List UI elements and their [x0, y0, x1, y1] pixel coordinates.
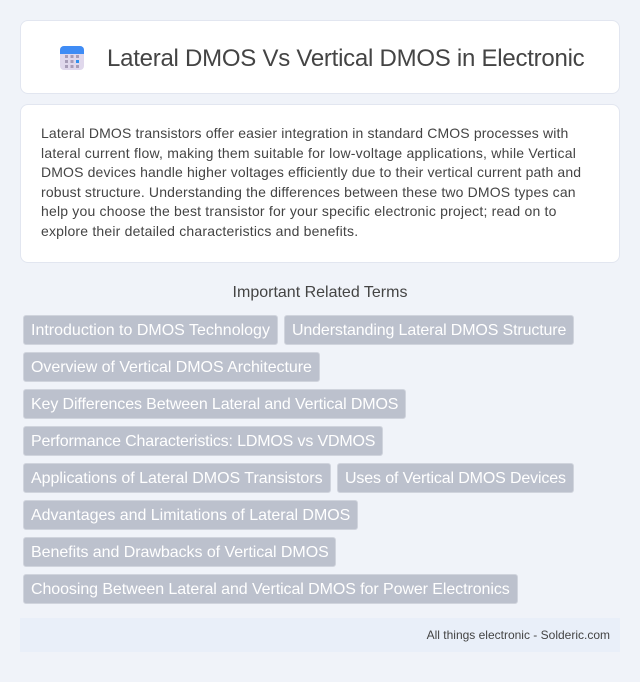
footer	[20, 618, 620, 652]
text block: description: Lateral DMOS transistors offer easier integration in standard CMOS processes with	[41, 125, 568, 141]
panel: description card	[20, 104, 620, 263]
text block: description: robust structure. Understanding the differences between these two DMOS types can	[41, 184, 576, 200]
text block: description	[41, 125, 581, 239]
title: Lateral DMOS Vs Vertical DMOS in Electronic	[107, 45, 584, 72]
text block: description: help you choose the best transistor for your specific electronic project; read on to	[41, 203, 557, 219]
panel: term tags: Overview of Vertical DMOS Architecture	[31, 359, 312, 376]
panel: term tags: Uses of Vertical DMOS Devices	[345, 470, 566, 487]
panel: term tags: Performance Characteristics: LDMOS vs VDMOS	[31, 433, 375, 450]
panel: term tags: Understanding Lateral DMOS Structure	[292, 322, 566, 339]
panel: term tags: Applications of Lateral DMOS Transistors	[31, 470, 323, 487]
icon: calendar	[60, 46, 84, 70]
panel: term tags: Choosing Between Lateral and Vertical DMOS for Power Electronics	[31, 581, 510, 598]
heading: related terms: Important Related Terms	[233, 284, 407, 301]
panel: title card	[20, 20, 620, 94]
panel: term tags: Key Differences Between Lateral and Vertical DMOS	[31, 396, 398, 413]
panel: term tags	[23, 315, 574, 604]
footer: All things electronic - Solderic.com	[427, 628, 610, 642]
panel: term tags: Benefits and Drawbacks of Vertical DMOS	[31, 544, 329, 561]
text block: description: explore their detailed characteristics and benefits.	[41, 223, 358, 239]
text block: description: DMOS devices handle higher voltages efficiently due to their vertical current path and	[41, 164, 581, 180]
panel: term tags: Introduction to DMOS Technology	[31, 322, 270, 339]
panel: term tags: Advantages and Limitations of Lateral DMOS	[31, 507, 350, 524]
text block: description: lateral current flow, making them suitable for low-voltage applications, while Vertical	[41, 145, 576, 161]
